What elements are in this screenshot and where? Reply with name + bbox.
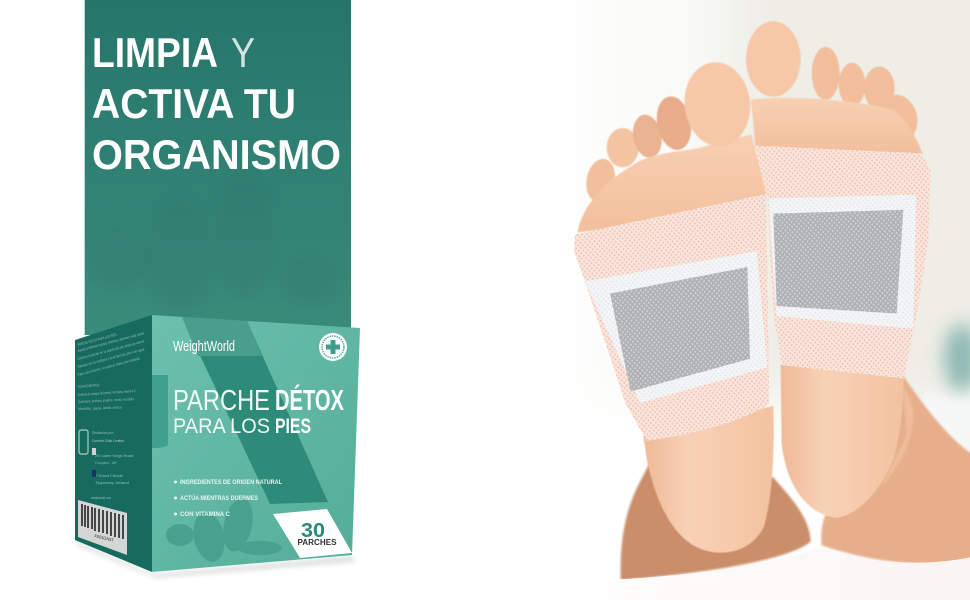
box side face: INGREDIENTES: [78, 383, 100, 389]
box side face [75, 315, 152, 572]
box front face [152, 315, 360, 572]
right big toe [746, 21, 801, 97]
box side face: Coloca el parche en la planta del pie antes de dormir [77, 339, 146, 361]
product name [173, 383, 344, 438]
quality seal [319, 333, 347, 361]
left foot heel [643, 406, 774, 553]
left patch band [574, 194, 769, 441]
sheet [560, 547, 970, 600]
30 parches badge: PARCHES [298, 538, 337, 547]
box side face: Croydon, UK [95, 461, 118, 465]
box side face: 26 Lower Kings Road [95, 454, 133, 458]
left big toe [678, 55, 757, 153]
box side face: PARCHE DÉTOX PARA LOS PIES [77, 332, 117, 347]
barcode [78, 500, 127, 555]
box side face: Tipperary, Ireland [95, 481, 129, 485]
product name: PARCHE [173, 385, 270, 417]
side logo [79, 430, 88, 454]
product name: PIES [275, 415, 311, 438]
title: Y [231, 29, 255, 76]
faint footprints watermark [90, 175, 340, 313]
box side face: Distribuido por: [92, 431, 114, 435]
box side face: Comfort Click Limited [92, 439, 124, 443]
legs behind [621, 376, 970, 580]
box side face: Quitosano, dextrina, jengibre, menta, eucalipto [78, 397, 134, 404]
product name: PARA LOS [173, 415, 270, 438]
bullet list [174, 479, 282, 518]
bullet list: ACTÚA MIENTRAS DUERMES [180, 493, 258, 502]
right foot toes [812, 47, 924, 147]
barcode: X001GN4T [94, 533, 115, 543]
30 parches badge: 30 [301, 520, 325, 542]
green banner [84, 0, 351, 335]
product box [75, 315, 360, 578]
title [92, 29, 341, 178]
title: LIMPIA [92, 29, 218, 76]
left foot sole [577, 134, 766, 232]
bullet list: INGREDIENTES DE ORIGEN NATURAL [180, 479, 282, 486]
left foot toes [582, 92, 696, 206]
box side face: Extracto de vinagre de bambú, turmalina, vitamina C [78, 389, 136, 397]
right patch band [755, 146, 931, 378]
box side face: Para uso externo, no aplicar sobre piel dañada [77, 357, 140, 377]
right foot heel [781, 364, 904, 518]
right foot sole [751, 98, 923, 154]
title: ORGANISMO [92, 131, 341, 178]
30 parches badge [273, 509, 352, 558]
logo text: WeightWorld [173, 339, 235, 355]
box side face: Ayuda a eliminar toxinas mientras duermes cada noche [77, 331, 145, 353]
box side face: Retíralo por la mañana y lava bien los pies con agua [77, 347, 145, 369]
title: ACTIVA TU [92, 80, 296, 127]
footprints on box [166, 496, 282, 565]
photo: feet with detox patches [560, 21, 970, 600]
product name: DÉTOX [275, 383, 344, 417]
box side face: 7 Grand Parade [95, 474, 123, 478]
box side face: weightworld.com [91, 496, 111, 500]
box side face: Almidón, agua, ácido cítrico [78, 405, 122, 411]
box shadow [75, 540, 356, 578]
bullet list: CON VITAMINA C [180, 511, 230, 518]
